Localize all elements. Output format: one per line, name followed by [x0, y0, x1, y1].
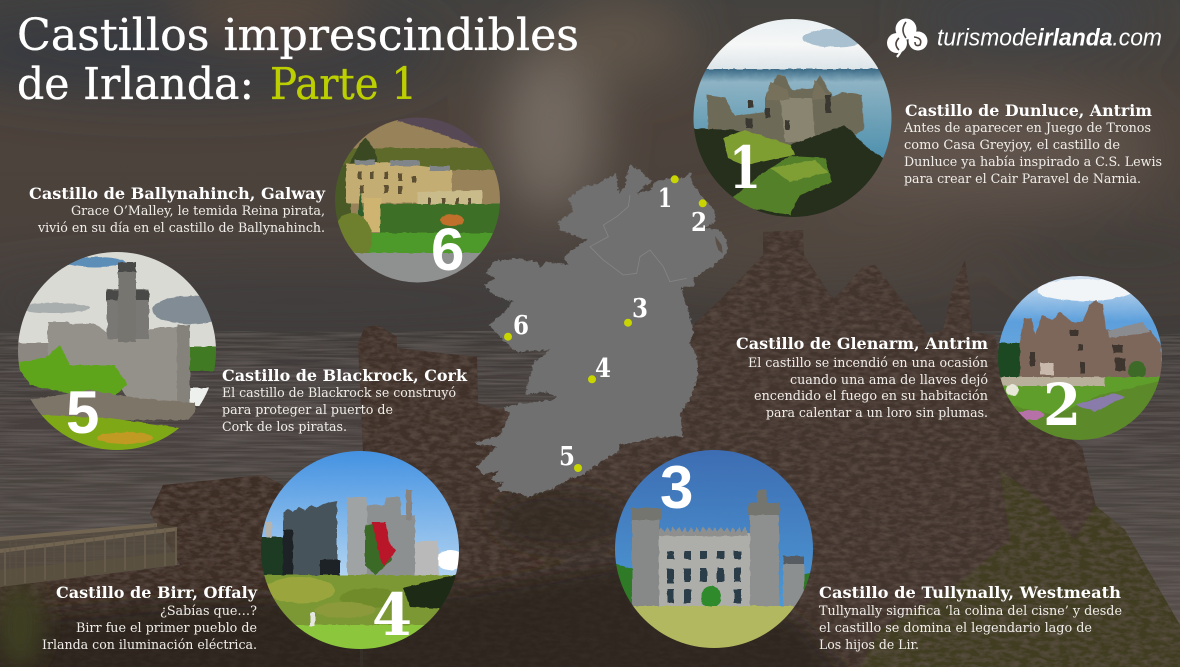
description	[903, 121, 1162, 187]
photo number 6: 6	[431, 216, 464, 283]
photo number 3: 3	[660, 454, 693, 521]
heading: Castillo de Birr, Offaly	[56, 583, 258, 602]
island silhouette	[473, 165, 727, 497]
description	[42, 604, 257, 653]
photo number 5: 5	[66, 379, 99, 446]
logo: turismodeirlanda.com	[887, 18, 1162, 57]
heading: Castillo de Dunluce, Antrim	[905, 101, 1152, 120]
panel: castle 6 Ballynahinch	[30, 118, 500, 282]
heading: Castillo de Glenarm, Antrim	[736, 334, 988, 353]
description: Tullynally significa ‘la colina del cisne’ y desde	[819, 604, 1122, 619]
photo circle 5	[18, 252, 216, 450]
description: Cork de los piratas.	[222, 420, 347, 435]
map of Ireland	[473, 165, 727, 497]
panel: castle 2 Glenarm	[736, 276, 1162, 440]
location marker 3	[624, 294, 648, 327]
panel: castle 4 Birr	[42, 451, 459, 649]
heading: Castillo de Ballynahinch, Galway	[29, 184, 326, 203]
location marker 1: 1	[658, 184, 672, 214]
description: el castillo se domina el legendario lago de	[819, 621, 1092, 636]
photo circle 2	[998, 276, 1162, 440]
location marker 1	[658, 175, 679, 214]
panel: castle 5 Blackrock	[18, 252, 468, 450]
description: Birr fue el primer pueblo de	[76, 621, 257, 636]
description: para crear el Cair Paravel de Narnia.	[904, 172, 1141, 187]
description: Dunluce ya había inspirado a C.S. Lewis	[904, 155, 1162, 170]
icon: shamrock	[887, 18, 928, 57]
description	[748, 356, 988, 421]
wooden walkway	[0, 523, 177, 587]
title	[17, 10, 579, 110]
photo circle 4	[261, 451, 459, 649]
description	[37, 204, 325, 236]
mid wall	[358, 325, 560, 667]
photo circle 1	[694, 19, 892, 217]
description: como Casa Greyjoy, el castillo de	[904, 138, 1120, 153]
description: Antes de aparecer en Juego de Tronos	[903, 121, 1151, 136]
description: para calentar a un loro sin plumas.	[766, 406, 988, 421]
description: ¿Sabías que…?	[160, 604, 257, 619]
title: de Irlanda:	[17, 59, 254, 110]
logo: turismodeirlanda.com: turismodeirlanda.com	[937, 24, 1162, 52]
lower shadow on rocks	[0, 490, 860, 667]
heading: Castillo de Blackrock, Cork	[222, 366, 468, 385]
description	[222, 386, 456, 435]
description: El castillo de Blackrock se construyó	[222, 386, 456, 401]
photo circle 3	[615, 450, 813, 648]
location marker 6: 6	[513, 311, 529, 341]
location marker 5: 5	[559, 442, 575, 472]
castle ruin: right building	[470, 230, 1180, 667]
panel: castle 3 Tullynally	[605, 440, 1122, 656]
description	[819, 604, 1122, 653]
photo number 4: 4	[372, 581, 412, 649]
location marker 2: 2	[691, 208, 707, 238]
description: Los hijos de Lir.	[819, 638, 919, 653]
panel: castle 1 Dunluce	[694, 19, 1162, 217]
location marker 3: 3	[632, 294, 648, 324]
description: cuando una ama de llaves dejó	[790, 373, 988, 388]
photo number 2: 2	[1043, 371, 1081, 439]
cliff grass	[860, 470, 1180, 667]
location marker 4: 4	[595, 354, 611, 384]
description: Irlanda con iluminación eléctrica.	[42, 638, 257, 653]
photo number 1: 1	[729, 134, 761, 202]
rock left of bridge	[0, 475, 360, 667]
title: Castillos imprescindibles	[17, 10, 579, 61]
heading: Castillo de Tullynally, Westmeath	[819, 583, 1121, 602]
location marker 6	[504, 311, 529, 341]
title: Parte 1	[270, 59, 417, 110]
photo circle 6	[335, 118, 500, 282]
description: El castillo se incendió en una ocasión	[748, 356, 988, 371]
description: vivió en su día en el castillo de Ballynahinch.	[37, 221, 325, 236]
description: para proteger al puerto de	[222, 403, 393, 418]
location marker 4	[588, 354, 611, 384]
description: Grace O’Malley, le temida Reina pirata,	[71, 204, 325, 219]
description: encendido el fuego en su habitación	[754, 389, 988, 404]
